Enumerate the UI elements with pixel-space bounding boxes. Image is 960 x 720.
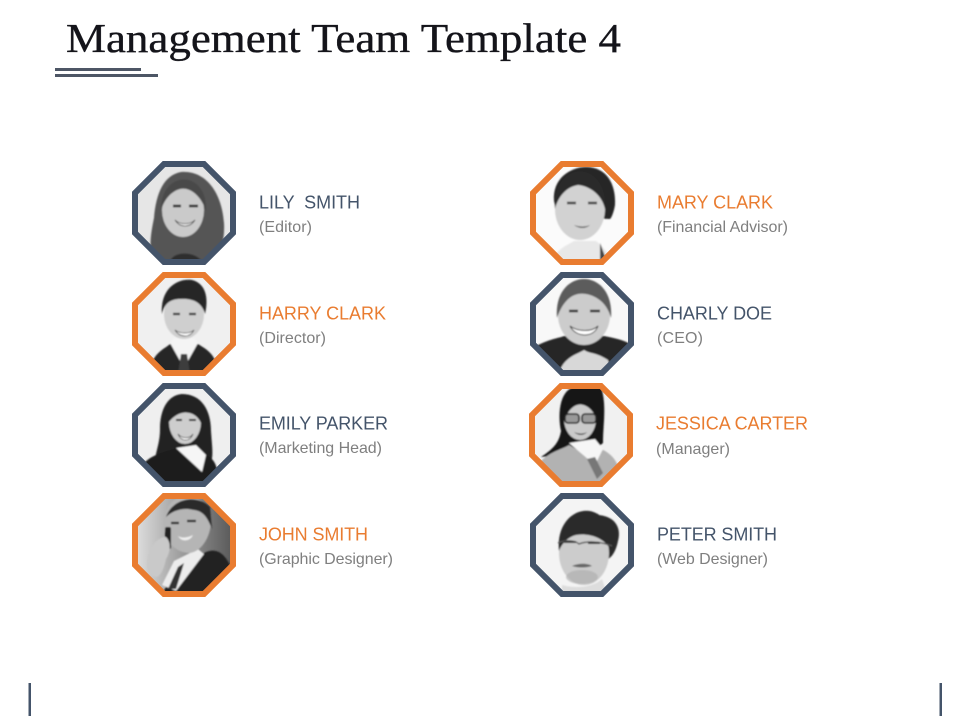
person: Lily Smith: [132, 161, 360, 265]
photo: Jessica Carter: [535, 389, 627, 481]
photo: Mary Clark: [552, 167, 616, 259]
octagon frame: [533, 496, 631, 594]
role: (Marketing Head): [259, 440, 382, 457]
photo: Peter Smith: [536, 499, 628, 591]
octagon frame: [135, 275, 233, 373]
photo: Lily Smith: [138, 167, 230, 259]
role: (Editor): [259, 219, 312, 236]
role: (Manager): [656, 441, 730, 458]
role: (Graphic Designer): [259, 551, 393, 568]
octagon frame: [135, 164, 233, 262]
name: EMILY PARKER: [259, 414, 388, 434]
name: HARRY CLARK: [259, 304, 386, 324]
octagon frame: [135, 496, 233, 594]
role: (Director): [259, 330, 326, 347]
photo: Charly Doe: [537, 278, 628, 370]
footer mark right: [940, 683, 942, 716]
octagon frame: [135, 386, 233, 484]
person: Harry Clark: [132, 272, 386, 376]
role: (Web Designer): [657, 551, 768, 568]
name: LILY SMITH: [259, 192, 360, 212]
role: (CEO): [657, 330, 703, 347]
name: MARY CLARK: [657, 192, 773, 212]
person: Jessica Carter: [529, 383, 808, 487]
name: JOHN SMITH: [259, 524, 368, 544]
role: (Financial Advisor): [657, 219, 788, 236]
person: Emily Parker: [132, 383, 388, 487]
octagon frame: [532, 386, 630, 484]
name: PETER SMITH: [657, 524, 777, 544]
photo: John Smith: [138, 499, 230, 591]
octagon frame: [533, 164, 631, 262]
octagon frame: [533, 275, 631, 373]
footer mark left: [28, 683, 31, 716]
name: JESSICA CARTER: [656, 414, 808, 434]
person: Peter Smith: [530, 493, 777, 597]
title: Management Team Template 4: [66, 15, 621, 61]
title underline: [55, 68, 158, 77]
person: John Smith: [132, 493, 393, 597]
person: Mary Clark: [530, 161, 788, 265]
photo: Harry Clark: [138, 278, 230, 370]
name: CHARLY DOE: [657, 304, 772, 324]
photo: Emily Parker: [138, 389, 230, 481]
person: Charly Doe: [530, 272, 772, 376]
